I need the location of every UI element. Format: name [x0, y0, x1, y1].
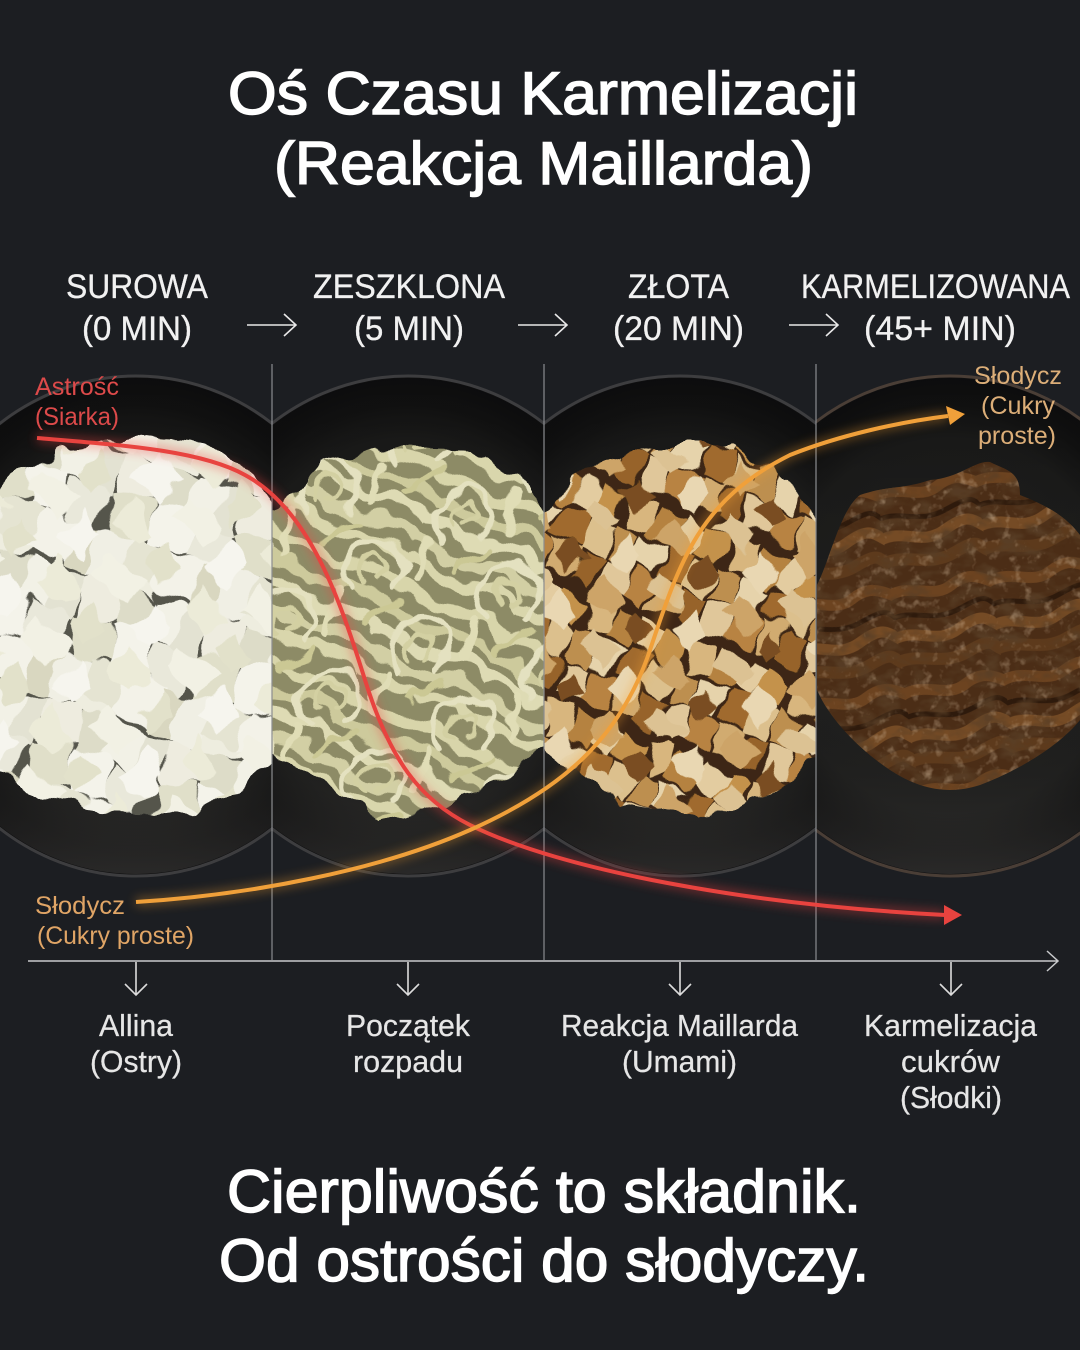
stage divider lines: [272, 364, 816, 960]
text: karmelizacja cukrow: Karmelizacja: [864, 1008, 1038, 1043]
panel: golden onion in pan: [544, 374, 816, 878]
closing statement: Od ostrości do słodyczy.: [219, 1227, 869, 1294]
title: Oś Czasu Karmelizacji: [228, 60, 858, 127]
header: zeszklona: (5 MIN): [354, 310, 464, 348]
arrow: down to karmelizacja: [940, 962, 962, 995]
header: karmelizowana: (45+ MIN): [864, 310, 1016, 348]
text: karmelizacja cukrow: (Słodki): [900, 1080, 1002, 1115]
curve: sharpness falling: [37, 438, 962, 925]
label: sharpness: (Siarka): [35, 403, 119, 431]
header: surowa: SUROWA: [66, 268, 208, 306]
label: sweetness right: proste): [978, 422, 1056, 450]
arrow: down to allina: [125, 962, 147, 995]
diced white onion: [0, 436, 282, 814]
label: sweetness left: (Cukry proste): [37, 922, 194, 950]
softened onion strips: [262, 445, 554, 820]
arrow: down to maillard: [669, 962, 691, 995]
stage headers: [66, 268, 1070, 348]
title: (Reakcja Maillarda): [274, 130, 813, 197]
text: karmelizacja cukrow: cukrów: [901, 1044, 1001, 1079]
panel: raw onion in pan: [0, 374, 272, 878]
text: poczatek rozpadu: [346, 1008, 470, 1079]
text: poczatek rozpadu: rozpadu: [353, 1044, 463, 1079]
curve: sweetness rising: [136, 406, 965, 902]
header: zlota: [613, 268, 744, 348]
header: zeszklona: ZESZKLONA: [313, 268, 505, 306]
header: surowa: (0 MIN): [82, 310, 192, 348]
text: allina: [90, 1008, 182, 1079]
text: allina: Allina: [99, 1008, 174, 1043]
closing statement: Cierpliwość to składnik.: [227, 1158, 861, 1225]
arrow: zeszklona to zlota: [518, 314, 567, 336]
golden onion pieces: [534, 445, 826, 820]
text: reakcja maillarda: [561, 1008, 799, 1079]
panel: translucent onion in pan: [272, 374, 544, 878]
arrow: zlota to karmelizowana: [789, 314, 838, 336]
header: zeszklona: [313, 268, 505, 348]
label: sweetness left: [35, 892, 194, 950]
header: karmelizowana: [801, 268, 1070, 348]
arrow: down to rozpad: [397, 962, 419, 995]
closing statement: [219, 1158, 869, 1294]
text: reakcja maillarda: Reakcja Maillarda: [561, 1008, 799, 1043]
label: sharpness: [35, 373, 119, 431]
label: sharpness: Astrość: [35, 373, 119, 401]
caramelized onion mass: [816, 455, 1080, 800]
arrow: surowa to zeszklona: [247, 314, 296, 336]
text: poczatek rozpadu: Początek: [346, 1008, 470, 1043]
text: reakcja maillarda: (Umami): [622, 1044, 737, 1079]
header: zlota: ZŁOTA: [628, 268, 729, 306]
label: sweetness right: [974, 362, 1062, 450]
timeline axis: [28, 951, 1058, 971]
title: [228, 60, 858, 197]
label: sweetness right: Słodycz: [974, 362, 1062, 390]
label: sweetness left: Słodycz: [35, 892, 125, 920]
header: zlota: (20 MIN): [613, 310, 744, 348]
header: surowa: [66, 268, 208, 348]
panel: caramelized onion in pan: [816, 374, 1080, 878]
chemistry labels: [90, 962, 1038, 1115]
text: karmelizacja cukrow: [864, 1008, 1038, 1115]
label: sweetness right: (Cukry: [981, 392, 1056, 420]
text: allina: (Ostry): [90, 1044, 182, 1079]
